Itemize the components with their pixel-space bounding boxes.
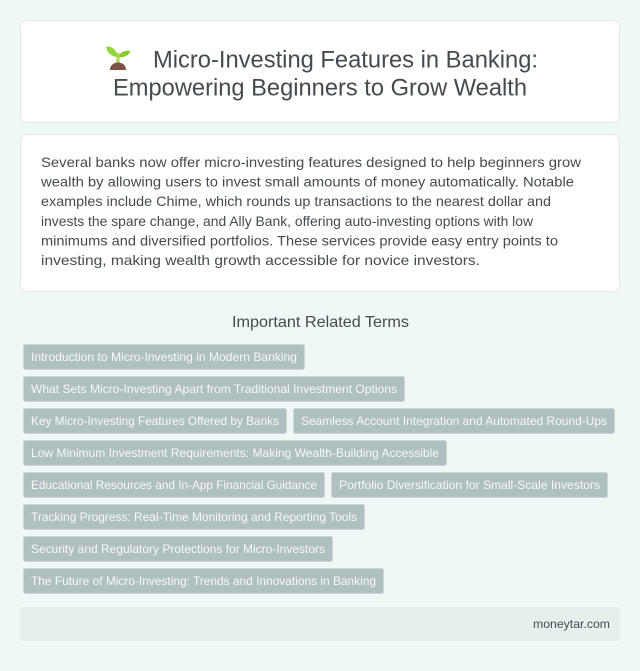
title: Empowering Beginners to Grow Wealth	[113, 74, 527, 102]
tag	[24, 408, 286, 434]
tag	[24, 440, 446, 466]
tag: Tracking Progress: Real-Time Monitoring and Reporting Tools	[31, 510, 357, 524]
tag	[332, 472, 608, 498]
text block: description: wealth by allowing users to invest small amounts of money automatically. Notable	[40, 174, 574, 190]
tags: related terms	[24, 344, 614, 594]
tag: Seamless Account Integration and Automated Round-Ups	[301, 414, 607, 428]
tag	[24, 344, 304, 370]
tag	[24, 472, 324, 498]
heading: related terms: Important Related Terms	[232, 314, 409, 331]
text block: description: investing, making wealth growth accessible for novice investors.	[41, 252, 480, 268]
tag: Security and Regulatory Protections for Micro-Investors	[31, 542, 325, 556]
tag	[24, 504, 364, 530]
tag: Introduction to Micro-Investing in Modern Banking	[31, 350, 297, 364]
tag: Key Micro-Investing Features Offered by Banks	[31, 414, 279, 428]
text block: description	[40, 154, 582, 268]
footer: moneytar.com	[533, 617, 610, 631]
title: Micro-Investing Features in Banking:	[153, 46, 538, 74]
text block: description: examples include Chime, which rounds up transactions to the nearest dollar and	[41, 193, 551, 209]
tag: The Future of Micro-Investing: Trends and Innovations in Banking	[31, 574, 376, 588]
footer	[20, 607, 620, 641]
tag	[24, 568, 384, 594]
text block: description: invests the spare change, and Ally Bank, offering auto-investing options with low	[41, 213, 534, 229]
tag: Educational Resources and In-App Financial Guidance	[31, 478, 317, 492]
tag	[294, 408, 614, 434]
panel: description	[20, 134, 620, 292]
text block: description: Several banks now offer micro-investing features designed to help beginners grow	[41, 154, 582, 170]
text block: description: minimums and diversified portfolios. These services provide easy entry points to	[41, 232, 558, 248]
tag: What Sets Micro-Investing Apart from Traditional Investment Options	[31, 382, 397, 396]
tag	[24, 536, 332, 562]
icon: seedling	[106, 46, 130, 70]
tag: Low Minimum Investment Requirements: Making Wealth-Building Accessible	[31, 446, 439, 460]
title	[113, 46, 538, 102]
panel: header card	[20, 20, 620, 122]
tag	[24, 376, 404, 402]
tag: Portfolio Diversification for Small-Scale Investors	[339, 478, 600, 492]
